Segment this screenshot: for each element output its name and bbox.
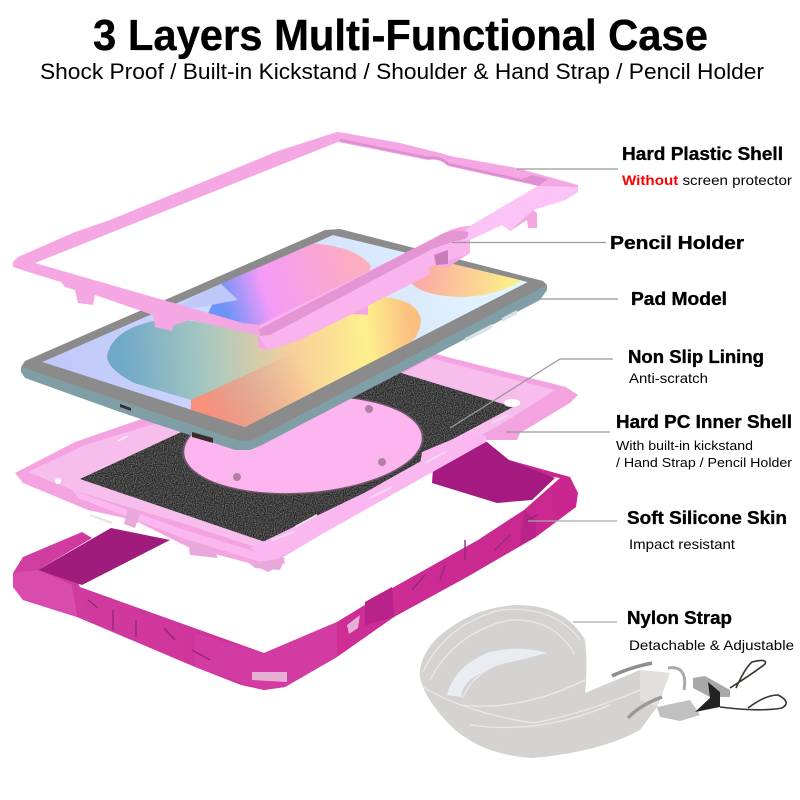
callout: pencil holder: Pencil Holder — [610, 232, 744, 253]
callout: soft silicone skin — [528, 507, 787, 552]
callout: soft silicone skin: Impact resistant — [629, 536, 735, 552]
kickstand disc — [179, 388, 427, 502]
callout: soft silicone skin: Soft Silicone Skin — [627, 507, 787, 528]
title: 3 Layers Multi-Functional Case — [93, 11, 708, 60]
hard PC inner shell layer — [15, 353, 578, 572]
callout: hard PC inner shell: Hard PC Inner Shell — [616, 411, 792, 432]
hard plastic shell frame — [13, 132, 578, 350]
soft silicone skin layer — [13, 438, 578, 690]
callout: hard PC inner shell: With built-in kickstand — [616, 438, 753, 453]
callout: pad model: Pad Model — [631, 288, 727, 309]
subtitle: Shock Proof / Built-in Kickstand / Shoulder & Hand Strap / Pencil Holder — [40, 59, 765, 84]
callout: hard PC inner shell: / Hand Strap / Pencil Holder — [616, 455, 793, 470]
pad model tablet — [21, 229, 547, 450]
nylon strap — [420, 605, 670, 758]
metal clips and cords — [612, 660, 786, 721]
callout: nylon strap — [573, 607, 794, 653]
callout: nylon strap: Nylon Strap — [627, 607, 732, 628]
callout: hard plastic shell: Without screen protector — [622, 172, 792, 188]
callout: hard PC inner shell — [506, 411, 793, 470]
callout: non slip lining — [450, 346, 764, 428]
tablet screen wallpaper — [42, 235, 528, 430]
callout: hard plastic shell — [517, 143, 792, 188]
callout: non slip lining: Non Slip Lining — [628, 346, 764, 367]
callout: nylon strap: Detachable & Adjustable — [629, 637, 794, 653]
callout: non slip lining: Anti-scratch — [629, 370, 708, 386]
callout: hard plastic shell: Hard Plastic Shell — [622, 143, 783, 164]
